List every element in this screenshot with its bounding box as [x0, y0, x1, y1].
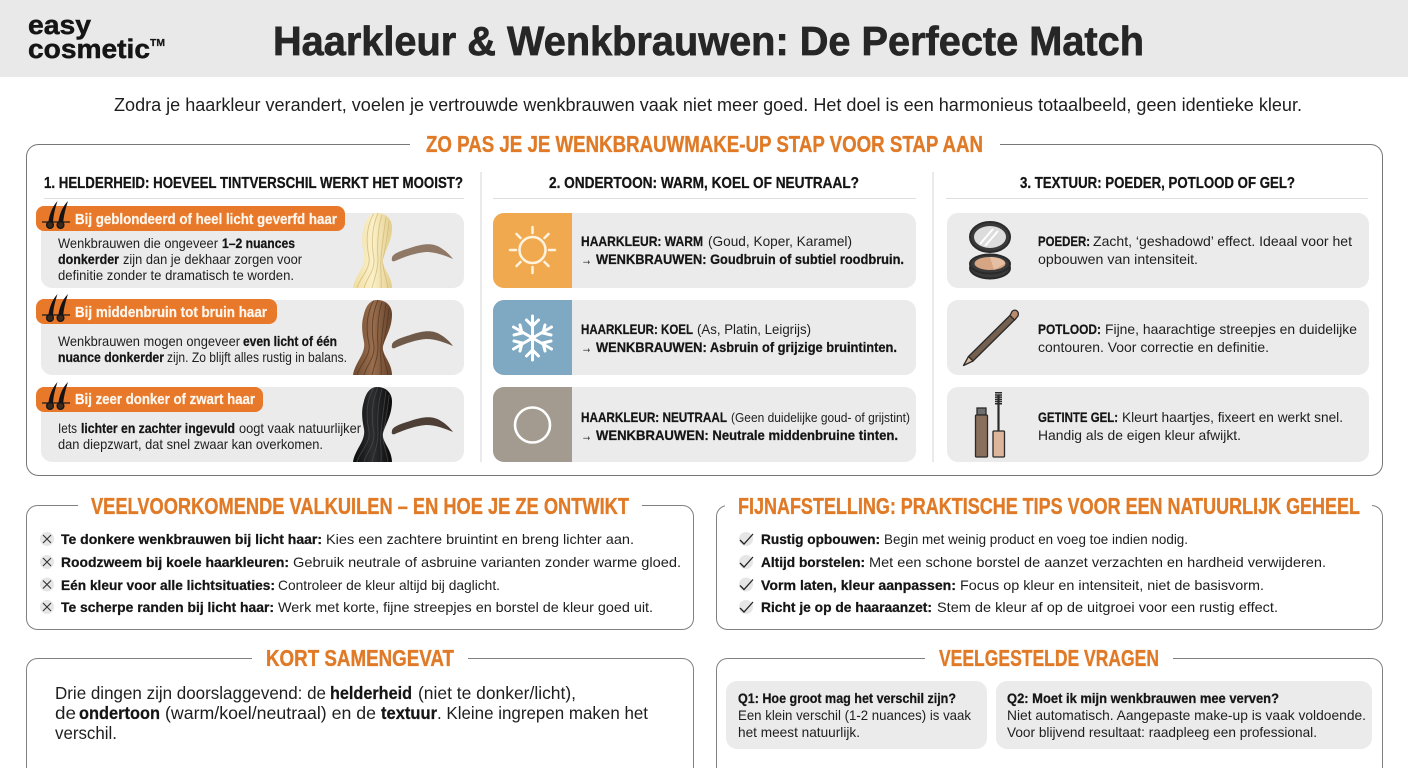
- card: bruin haar: Bij middenbruin tot bruin haar: [75, 304, 267, 321]
- card: potlood: POTLOOD:: [1038, 321, 1101, 337]
- card: koel: WENKBRAUWEN: Asbruin of grijzige bruintinten.: [596, 339, 897, 355]
- icon: circle: [515, 408, 550, 442]
- list of tips: [739, 531, 1326, 615]
- card: poeder: [947, 213, 1369, 288]
- faq card 2: Niet automatisch. Aangepaste make-up is vaak voldoende.: [1007, 707, 1366, 723]
- card: koel: (As, Platin, Leigrijs): [697, 321, 811, 337]
- card: potlood: Fijne, haarachtige streepjes en duidelijke: [1105, 321, 1357, 337]
- list of pitfalls: Te scherpe randen bij licht haar:: [61, 599, 274, 615]
- panel: valkuilen: [26, 493, 694, 630]
- column heading: 1. HELDERHEID: HOEVEEL TINTVERSCHIL WERKT HET MOOIST?: [44, 175, 463, 192]
- card: neutraal: HAARKLEUR: NEUTRAAL: [581, 409, 727, 425]
- logo: [28, 10, 165, 64]
- card: zwart haar: [36, 382, 464, 462]
- card: koel: [493, 300, 916, 375]
- card: warm: HAARKLEUR: WARM: [581, 233, 703, 249]
- logo: TM: [150, 38, 165, 49]
- card: poeder: POEDER:: [1038, 233, 1090, 249]
- card: warm: WENKBRAUWEN: Goudbruin of subtiel roodbruin.: [596, 251, 904, 267]
- list of pitfalls: Werk met korte, fijne streepjes en borstel de kleur goed uit.: [278, 599, 653, 615]
- faq card 1: Q1: Hoe groot mag het verschil zijn?: [738, 690, 956, 706]
- list of pitfalls: Te donkere wenkbrauwen bij licht haar:: [61, 531, 322, 547]
- summary text: (niet te donker/licht),: [418, 683, 576, 703]
- list of tips: Vorm laten, kleur aanpassen:: [761, 577, 956, 593]
- column heading: 2. ONDERTOON: WARM, KOEL OF NEUTRAAL?: [549, 175, 859, 192]
- panel: kort samengevat: [26, 645, 694, 768]
- list of pitfalls: Gebruik neutrale of asbruine varianten zonder warme gloed.: [293, 554, 681, 570]
- logo: cosmetic: [28, 34, 150, 64]
- card: bruin haar: zijn. Zo blijft alles rustig in balans.: [167, 349, 347, 365]
- header bar: [0, 0, 1408, 77]
- card: warm: →: [581, 250, 592, 269]
- card: getinte gel: GETINTE GEL:: [1038, 409, 1118, 425]
- panel: fijnafstelling: [716, 493, 1382, 630]
- card: licht haar: 1–2 nuances: [222, 235, 295, 251]
- column 2: ondertoon: [493, 175, 916, 462]
- summary text: . Kleine ingrepen maken het: [437, 703, 648, 723]
- card: warm: (Goud, Koper, Karamel): [708, 233, 852, 249]
- icon: compact: [970, 222, 1010, 278]
- faq card 2: Q2: Moet ik mijn wenkbrauwen mee verven?: [1007, 690, 1279, 706]
- summary text: (warm/koel/neutraal) en de: [165, 703, 376, 723]
- summary text: ondertoon: [79, 703, 160, 723]
- list of tips: Richt je op de haaraanzet:: [761, 599, 932, 615]
- icon: sun: [510, 227, 555, 273]
- list of pitfalls: Eén kleur voor alle lichtsituaties:: [61, 577, 275, 593]
- icon: snowflake: [514, 316, 552, 360]
- list of tips: Stem de kleur af op de uitgroei voor een rustig effect.: [937, 599, 1278, 615]
- card: getinte gel: Handig als de eigen kleur afwijkt.: [1038, 427, 1241, 443]
- list of pitfalls: Roodzweem bij koele haarkleuren:: [61, 554, 289, 570]
- card: bruin haar: [36, 294, 464, 375]
- column 3: textuur: [947, 175, 1369, 462]
- panel: stap voor stap: [26, 131, 1382, 476]
- card: getinte gel: Kleurt haartjes, fixeert en werkt snel.: [1122, 409, 1343, 425]
- card: licht haar: donkerder: [58, 251, 119, 267]
- logo: easy: [28, 10, 91, 40]
- card: potlood: contouren. Voor correctie en definitie.: [1038, 339, 1269, 355]
- card: koel: HAARKLEUR: KOEL: [581, 321, 693, 337]
- summary text: de: [55, 703, 76, 723]
- faq card 2: [996, 681, 1372, 749]
- card: bruin haar: nuance donkerder: [58, 349, 164, 365]
- card: zwart haar: lichter en zachter ingevuld: [81, 420, 235, 436]
- panel heading: KORT SAMENGEVAT: [266, 645, 454, 671]
- list of pitfalls: [40, 531, 681, 615]
- card: zwart haar: oogt vaak natuurlijker: [239, 420, 361, 436]
- card: bruin haar: even licht of één: [243, 333, 337, 349]
- column 1: helderheid: [36, 175, 464, 462]
- summary text: [55, 683, 648, 743]
- list of tips: Altijd borstelen:: [761, 554, 865, 570]
- card: licht haar: [36, 201, 464, 288]
- card: poeder: opbouwen van intensiteit.: [1038, 251, 1198, 267]
- card: licht haar: Bij geblondeerd of heel licht geverfd haar: [75, 211, 337, 228]
- list of pitfalls: Controleer de kleur altijd bij daglicht.: [278, 577, 500, 593]
- icon: brow gel: [976, 392, 1004, 457]
- panel: veelgestelde vragen: [716, 645, 1382, 768]
- list of tips: Rustig opbouwen:: [761, 531, 880, 547]
- card: licht haar: zijn dan je dekhaar zorgen voor: [123, 251, 302, 267]
- list of pitfalls: Kies een zachtere bruintint en breng lichter aan.: [326, 531, 634, 547]
- panel heading: ZO PAS JE JE WENKBRAUWMAKE-UP STAP VOOR STAP AAN: [426, 131, 983, 157]
- faq card 1: [726, 681, 987, 749]
- summary text: helderheid: [330, 683, 412, 703]
- card: neutraal: →: [581, 426, 592, 445]
- card: zwart haar: Iets: [58, 420, 77, 436]
- card: zwart haar: Bij zeer donker of zwart haar: [75, 391, 255, 408]
- panel heading: VEELGESTELDE VRAGEN: [939, 645, 1159, 671]
- card: zwart haar: dan diepzwart, dat snel zwaar kan overkomen.: [58, 436, 323, 452]
- summary text: Drie dingen zijn doorslaggevend: de: [55, 683, 326, 703]
- card: poeder: Zacht, ‘geshadowd’ effect. Ideaal voor het: [1093, 233, 1352, 249]
- card: potlood: [947, 300, 1369, 375]
- summary text: verschil.: [55, 723, 117, 743]
- card: neutraal: (Geen duidelijke goud- of grijstint): [731, 410, 910, 425]
- faq card 2: Voor blijvend resultaat: raadpleeg een professional.: [1007, 724, 1317, 740]
- faq card 1: Een klein verschil (1-2 nuances) is vaak: [738, 707, 972, 723]
- summary text: textuur: [381, 703, 437, 723]
- column heading: 3. TEXTUUR: POEDER, POTLOOD OF GEL?: [1020, 175, 1295, 192]
- icon: pencil: [964, 310, 1018, 366]
- card: licht haar: Wenkbrauwen die ongeveer: [58, 235, 218, 251]
- card: warm: [493, 213, 916, 288]
- title: Haarkleur & Wenkbrauwen: De Perfecte Match: [273, 18, 1144, 64]
- card: koel: →: [581, 338, 592, 357]
- card: bruin haar: Wenkbrauwen mogen ongeveer: [58, 333, 240, 349]
- panel heading: VEELVOORKOMENDE VALKUILEN – EN HOE JE ZE ONTWIKT: [91, 493, 629, 519]
- list of tips: Begin met weinig product en voeg toe indien nodig.: [884, 531, 1188, 547]
- faq card 1: het meest natuurlijk.: [738, 724, 860, 740]
- list of tips: Focus op kleur en intensiteit, niet de basisvorm.: [960, 577, 1264, 593]
- card: neutraal: [493, 387, 916, 462]
- list of tips: Met een schone borstel de aanzet verzachten en hardheid verwijderen.: [869, 554, 1326, 570]
- card: licht haar: definitie zonder te dramatisch te worden.: [58, 267, 294, 283]
- intro text: Zodra je haarkleur verandert, voelen je vertrouwde wenkbrauwen vaak niet meer goed. Het doel is een harmonieus totaalbeeld, geen identieke kleur.: [114, 94, 1302, 115]
- card: getinte gel: [947, 387, 1369, 462]
- card: neutraal: WENKBRAUWEN: Neutrale middenbruine tinten.: [596, 427, 898, 443]
